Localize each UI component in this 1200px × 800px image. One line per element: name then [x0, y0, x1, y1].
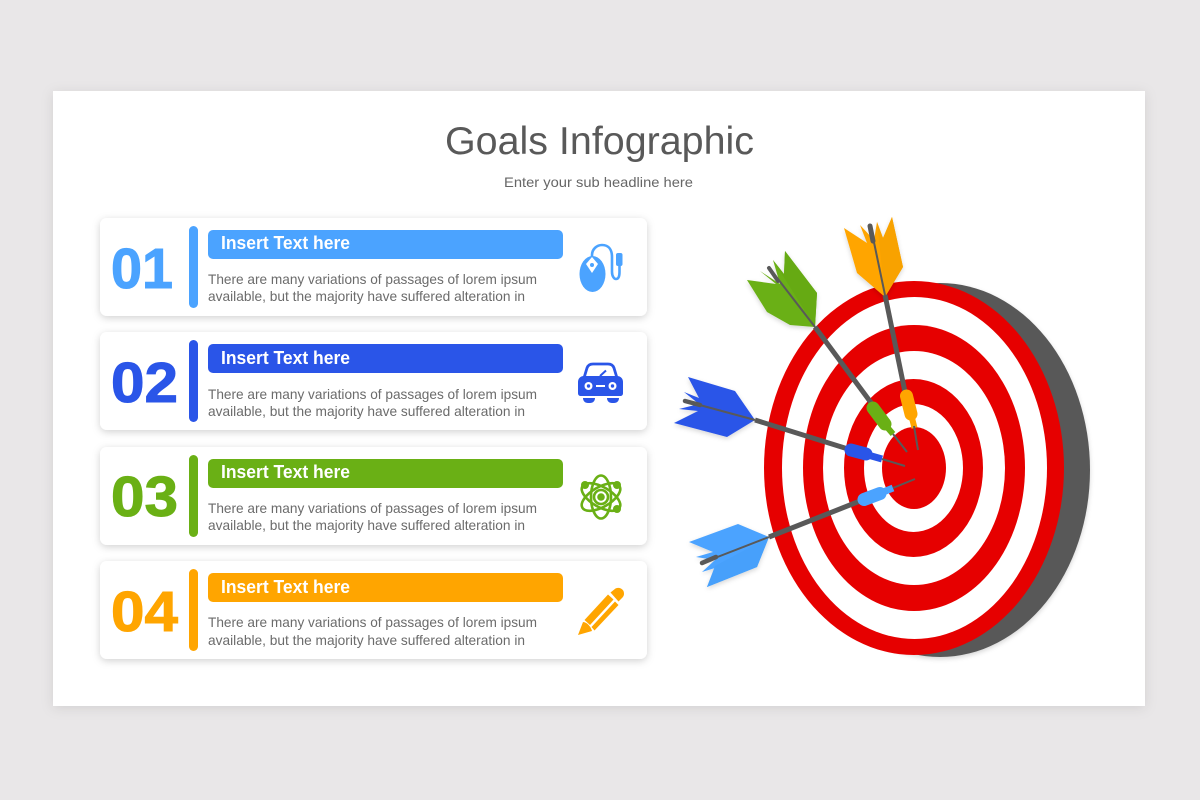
body text: available, but the majority have suffered alteration in: [208, 517, 525, 533]
body text: There are many variations of passages of lorem ipsum: [208, 500, 537, 516]
panel: item 03: [100, 447, 647, 545]
board side shadow: [790, 283, 1090, 657]
body text: There are many variations of passages of lorem ipsum: [208, 614, 537, 630]
sub headline: Enter your sub headline here: [504, 174, 693, 190]
heading bar: [208, 459, 563, 488]
arrow: light blue: [689, 479, 915, 587]
body text: There are many variations of passages of lorem ipsum: [208, 386, 537, 402]
heading text: Insert Text here: [221, 233, 350, 253]
white slide panel: [53, 91, 1145, 706]
number 02: 02: [111, 351, 178, 415]
accent bar: [189, 569, 198, 651]
icon: atom: [577, 476, 625, 518]
arrow: blue: [674, 377, 905, 466]
heading text: Insert Text here: [221, 462, 350, 482]
panel: item 02: [100, 332, 647, 430]
title: Goals Infographic: [445, 120, 754, 163]
icon: pencil: [578, 588, 624, 635]
panel: item 01: [100, 218, 647, 316]
rings: [764, 281, 1064, 655]
body text: available, but the majority have suffered alteration in: [208, 632, 525, 648]
arrow: green: [747, 251, 907, 452]
icon: mouse: [580, 245, 622, 292]
arrow: orange: [844, 217, 918, 450]
body text: available, but the majority have suffered alteration in: [208, 403, 525, 419]
body text: available, but the majority have suffered alteration in: [208, 288, 525, 304]
accent bar: [189, 226, 198, 308]
body text: There are many variations of passages of lorem ipsum: [208, 271, 537, 287]
accent bar: [189, 340, 198, 422]
heading bar: [208, 344, 563, 373]
heading text: Insert Text here: [221, 348, 350, 368]
heading bar: [208, 230, 563, 259]
number 04: 04: [111, 580, 178, 644]
accent bar: [189, 455, 198, 537]
panel: item 04: [100, 561, 647, 659]
icon: car: [578, 364, 623, 403]
number 01: 01: [111, 237, 173, 301]
heading text: Insert Text here: [221, 577, 350, 597]
number 03: 03: [111, 465, 178, 529]
target board: [764, 281, 1090, 657]
heading bar: [208, 573, 563, 602]
